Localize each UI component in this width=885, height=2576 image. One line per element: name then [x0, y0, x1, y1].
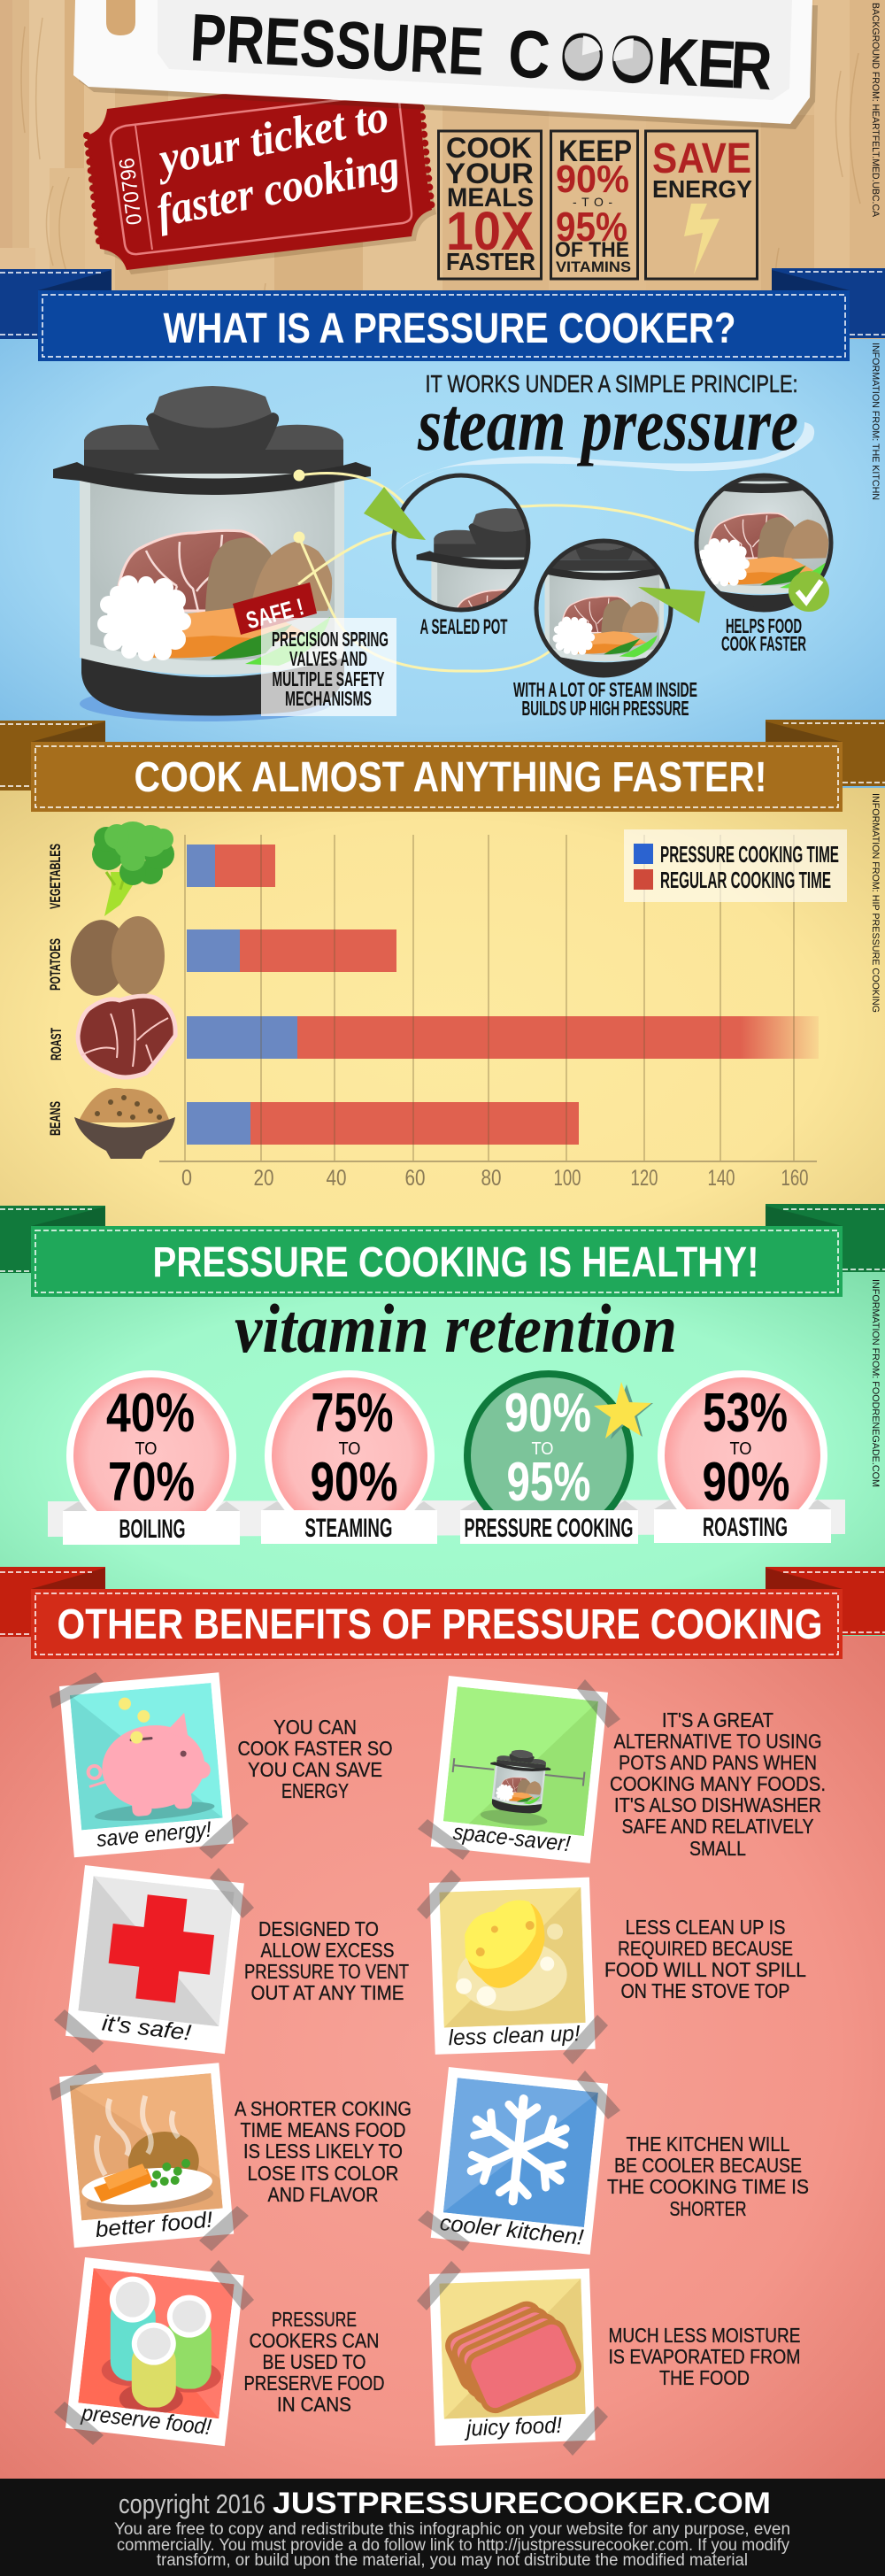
- benefit text: better food: IS LESS LIKELY TO: [243, 2140, 403, 2163]
- benefit text: cooler kitchen: BE COOLER BECAUSE: [614, 2154, 802, 2177]
- benefit text: better food: TIME MEANS FOOD: [241, 2118, 405, 2141]
- title: COOKER: [506, 17, 774, 104]
- benefit text: less clean up: FOOD WILL NOT SPILL: [604, 1958, 806, 1981]
- benefit text: less clean up: LESS CLEAN UP IS: [625, 1916, 786, 1939]
- benefit text: preserve food: COOKERS CAN: [250, 2329, 379, 2352]
- benefit text: less clean up: ON THE STOVE TOP: [621, 1979, 789, 2002]
- caption: better food!: [95, 2208, 214, 2242]
- stat box: cook your meals 10x faster: [439, 131, 542, 279]
- photo card: save energy: [50, 1672, 249, 1859]
- vitamin circle: roasting: 90%: [703, 1452, 789, 1513]
- vitamin circle: steaming: 90%: [310, 1452, 398, 1513]
- bar: roast: [187, 1016, 819, 1059]
- photo card: better food: [50, 2063, 249, 2251]
- axis labels: 100: [554, 1166, 581, 1191]
- circle: food cooks faster: [694, 473, 834, 613]
- vitamin circle: pressure cooking: PRESSURE COOKING: [464, 1514, 634, 1543]
- axis labels: 160: [781, 1166, 809, 1191]
- benefit text: space-saver: SMALL: [689, 1837, 746, 1860]
- benefit text: space-saver: [610, 1708, 826, 1860]
- benefit text: space-saver: COOKING MANY FOODS.: [610, 1772, 826, 1795]
- section background: green: [0, 1272, 885, 1637]
- benefit text: less clean up: REQUIRED BECAUSE: [618, 1937, 793, 1960]
- benefit text: preserve food: BE USED TO: [262, 2350, 366, 2373]
- benefit text: cooler kitchen: THE COOKING TIME IS: [607, 2175, 809, 2198]
- benefit text: save energy: YOU CAN SAVE: [248, 1758, 382, 1781]
- bar: vegetables: [187, 845, 275, 887]
- benefit text: cooler kitchen: [607, 2133, 809, 2220]
- benefit text: space-saver: ALTERNATIVE TO USING: [614, 1730, 821, 1753]
- photo card: cooler kitchen: [418, 2067, 620, 2255]
- stat box: keep 90% to 95% of the vitamins: -TO-: [573, 195, 612, 209]
- icon: roast: [78, 996, 175, 1077]
- photo card: space-saver: [418, 1676, 620, 1863]
- caption: save energy!: [96, 1817, 212, 1852]
- benefit text: it's safe: [244, 1917, 409, 2004]
- vitamin circle: pressure cooking: 95%: [506, 1452, 591, 1513]
- benefit text: save energy: ENERGY: [281, 1779, 349, 1802]
- benefit text: space-saver: SAFE AND RELATIVELY: [621, 1815, 814, 1838]
- big pot illustration: [53, 386, 371, 721]
- benefit text: better food: [235, 2097, 412, 2206]
- site name: JUSTPRESSURECOOKER.COM: [273, 2487, 771, 2520]
- benefit text: preserve food: PRESSURE: [272, 2308, 357, 2331]
- arrow: to sealed pot: [364, 487, 426, 540]
- label: a sealed pot: A SEALED POT: [419, 615, 508, 639]
- credit: the kitchn: INFORMATION FROM: THE KITCHN: [870, 343, 881, 500]
- benefit text: save energy: YOU CAN: [273, 1716, 357, 1739]
- vitamin circle: roasting: ROASTING: [703, 1513, 788, 1542]
- caption: it's safe!: [101, 2010, 192, 2046]
- ribbon: cook almost anything faster: [0, 720, 885, 812]
- vitamin circle: steaming: [261, 1374, 437, 1544]
- benefit text: space-saver: IT'S ALSO DISHWASHER: [614, 1793, 821, 1816]
- benefit text: less clean up: [604, 1916, 806, 2002]
- vitamin circle: steaming: STEAMING: [304, 1514, 393, 1543]
- benefit text: juicy food: [609, 2324, 800, 2389]
- ticket tagline: your ticket to: [150, 91, 392, 186]
- vitamin circle: roasting: 53%: [703, 1383, 788, 1444]
- vitamin circle: pressure cooking: [460, 1374, 653, 1544]
- stat box: keep 90% to 95% of the vitamins: [550, 131, 637, 279]
- benefit text: it's safe: OUT AT ANY TIME: [251, 1981, 404, 2004]
- vitamin circle: boiling: 70%: [108, 1452, 195, 1513]
- caption: less clean up!: [448, 2021, 581, 2050]
- category labels: [47, 844, 65, 1136]
- benefit text: it's safe: ALLOW EXCESS: [260, 1939, 395, 1962]
- label band: [48, 1500, 845, 1537]
- photo card: it's safe: [54, 1865, 254, 2054]
- licence text: You are free to copy and redistribute this infographic on your website for any purpose, even: [114, 2520, 790, 2539]
- clock icons in the two Os: [564, 35, 651, 76]
- label: helps food cook faster: HELPS FOOD: [726, 614, 802, 637]
- benefit text: save energy: COOK FASTER SO: [237, 1737, 393, 1760]
- stat box: keep 90% to 95% of the vitamins: 90%: [556, 158, 629, 201]
- icon: lightning bolt: [684, 204, 720, 274]
- heading: PRESSURE COOKING IS HEALTHY!: [152, 1239, 759, 1286]
- benefit text: juicy food: MUCH LESS MOISTURE: [609, 2324, 800, 2347]
- benefit text: it's safe: PRESSURE TO VENT: [244, 1960, 409, 1983]
- axis labels: 60: [405, 1166, 425, 1191]
- legend: [624, 829, 847, 902]
- axis labels: 0: [181, 1166, 192, 1191]
- ticket tagline: faster cooking: [152, 141, 404, 237]
- bar: potatoes: [187, 929, 396, 972]
- benefit text: preserve food: PRESERVE FOOD: [244, 2372, 384, 2395]
- bar: beans: [187, 1102, 579, 1145]
- credit: background source: BACKGROUND FROM: HEARTFELT.MED.UBC.CA: [870, 3, 881, 218]
- axis labels: [181, 1166, 809, 1191]
- vitamin circle: pressure cooking: TO: [531, 1439, 554, 1459]
- label: helps food cook faster: [721, 614, 806, 655]
- icon: star: [594, 1382, 653, 1439]
- icon: broccoli: [92, 821, 174, 916]
- benefit text: save energy: [237, 1716, 393, 1802]
- benefit text: cooler kitchen: SHORTER: [669, 2197, 747, 2220]
- benefit text: better food: AND FLAVOR: [267, 2183, 379, 2206]
- stat box: cook your meals 10x faster: 10X: [446, 201, 534, 261]
- category labels: BEANS: [47, 1101, 64, 1136]
- label: steam inside: BUILDS UP HIGH PRESSURE: [522, 697, 689, 720]
- photo card: less clean up: [417, 1870, 608, 2064]
- benefit text: space-saver: POTS AND PANS WHEN: [619, 1751, 817, 1774]
- axis labels: 120: [630, 1166, 658, 1191]
- connector lines: [295, 471, 694, 671]
- callout: safety mechanisms: [261, 618, 396, 716]
- benefit text: preserve food: IN CANS: [277, 2393, 351, 2416]
- stat box: keep 90% to 95% of the vitamins: VITAMINS: [556, 258, 631, 275]
- circle: sealed pot: [391, 473, 531, 613]
- vitamin circle: roasting: TO: [729, 1439, 752, 1459]
- arrow: to steam pot: [638, 587, 705, 623]
- benefit text: better food: LOSE ITS COLOR: [248, 2162, 398, 2185]
- steam pressure script heading: steam pressure: [417, 382, 798, 467]
- caption: preserve food!: [80, 2401, 212, 2440]
- callout: safety mechanisms: VALVES AND: [289, 647, 367, 670]
- photo card: juicy food: [417, 2261, 608, 2456]
- cutting board: [73, 0, 818, 129]
- credit: foodrenegade: INFORMATION FROM: FOODRENEGADE.COM: [870, 1279, 881, 1487]
- label: steam inside: WITH A LOT OF STEAM INSIDE: [513, 678, 697, 701]
- icon: check badge: [789, 571, 829, 612]
- vitamin circle: pressure cooking: 90%: [504, 1383, 591, 1444]
- axis labels: 140: [708, 1166, 735, 1191]
- stat box: keep 90% to 95% of the vitamins: 95%: [556, 204, 627, 250]
- title: PRESSURE: [189, 0, 486, 90]
- section background: blue: [0, 339, 885, 791]
- section background: yellow: [0, 788, 885, 1275]
- axis labels: 80: [481, 1166, 501, 1191]
- ribbon: other benefits: [0, 1567, 885, 1659]
- vitamin circle: boiling: 40%: [106, 1383, 195, 1444]
- credit: hip pressure cooking: INFORMATION FROM: HIP PRESSURE COOKING: [870, 793, 881, 1013]
- callout: safety mechanisms: MECHANISMS: [285, 687, 372, 710]
- category labels: VEGETABLES: [47, 844, 64, 909]
- axis labels: 20: [253, 1166, 274, 1191]
- callout: safety mechanisms: PRECISION SPRING: [272, 628, 389, 651]
- ticket: [87, 91, 436, 274]
- label: steam inside: [513, 678, 697, 720]
- benefit text: juicy food: IS EVAPORATED FROM: [609, 2345, 800, 2368]
- benefit text: cooler kitchen: THE KITCHEN WILL: [627, 2133, 790, 2156]
- ticket number: 070796: [115, 157, 147, 227]
- vitamin circle: boiling: TO: [135, 1439, 158, 1459]
- circle: steam inside: [533, 531, 676, 680]
- benefit text: better food: A SHORTER COKING: [235, 2097, 412, 2120]
- category labels: POTATOES: [47, 938, 64, 991]
- icon: potatoes: [65, 916, 165, 999]
- icon: bowl of beans: [74, 1088, 175, 1159]
- stat box: cook your meals 10x faster: MEALS: [447, 183, 534, 212]
- caption: juicy food!: [464, 2413, 563, 2441]
- heading: COOK ALMOST ANYTHING FASTER!: [135, 754, 766, 801]
- stat box: keep 90% to 95% of the vitamins: KEEP: [558, 135, 632, 168]
- caption: space-saver!: [452, 1820, 572, 1856]
- footer: [0, 2479, 885, 2576]
- licence text: transform, or build upon the material, you may not distribute the modified material: [157, 2551, 748, 2570]
- ribbon: what is a pressure cooker: [0, 268, 885, 361]
- stat box: cook your meals 10x faster: FASTER: [446, 248, 535, 275]
- bar chart: [159, 835, 819, 1191]
- vitamin circle: boiling: [63, 1374, 240, 1545]
- vitamin circle: roasting: [654, 1374, 831, 1543]
- label: helps food cook faster: COOK FASTER: [721, 632, 806, 655]
- stat box: save energy: SAVE: [652, 135, 751, 182]
- stat box: cook your meals 10x faster: YOUR: [445, 158, 534, 189]
- benefit text: space-saver: IT'S A GREAT: [662, 1708, 773, 1731]
- caption: cooler kitchen!: [439, 2210, 585, 2250]
- benefit text: juicy food: THE FOOD: [659, 2366, 750, 2389]
- heading: WHAT IS A PRESSURE COOKER?: [163, 305, 736, 352]
- vitamin circle: boiling: BOILING: [119, 1515, 186, 1544]
- axis labels: 40: [326, 1166, 347, 1191]
- stat box: save energy: [646, 131, 758, 279]
- stat box: cook your meals 10x faster: COOK: [446, 132, 532, 164]
- safe tag: SAFE !: [243, 593, 306, 634]
- benefit text: preserve food: [244, 2308, 384, 2416]
- title: [189, 0, 774, 104]
- category labels: ROAST: [48, 1028, 65, 1060]
- vitamin circle: steaming: TO: [338, 1439, 361, 1459]
- copyright line: copyright 2016: [119, 2488, 266, 2519]
- ticket tagline: [150, 91, 404, 237]
- photo card: preserve food: [54, 2257, 254, 2446]
- benefit text: it's safe: DESIGNED TO: [258, 1917, 379, 1940]
- licence text: commercially. You must provide a do follow link to http://justpressurecooker.com. If you modify: [117, 2536, 789, 2555]
- background: wood planks: [0, 0, 885, 345]
- vitamin retention script heading: vitamin retention: [235, 1290, 677, 1367]
- ribbon: pressure cooking is healthy: [0, 1204, 885, 1297]
- vitamin circle: steaming: 75%: [312, 1383, 393, 1444]
- stat box: keep 90% to 95% of the vitamins: OF THE: [555, 238, 629, 262]
- stat box: save energy: ENERGY: [652, 175, 752, 203]
- section background: red: [0, 1636, 885, 2480]
- swoosh: [395, 422, 814, 493]
- licence text: [114, 2520, 790, 2570]
- callout: safety mechanisms: MULTIPLE SAFETY: [273, 667, 384, 690]
